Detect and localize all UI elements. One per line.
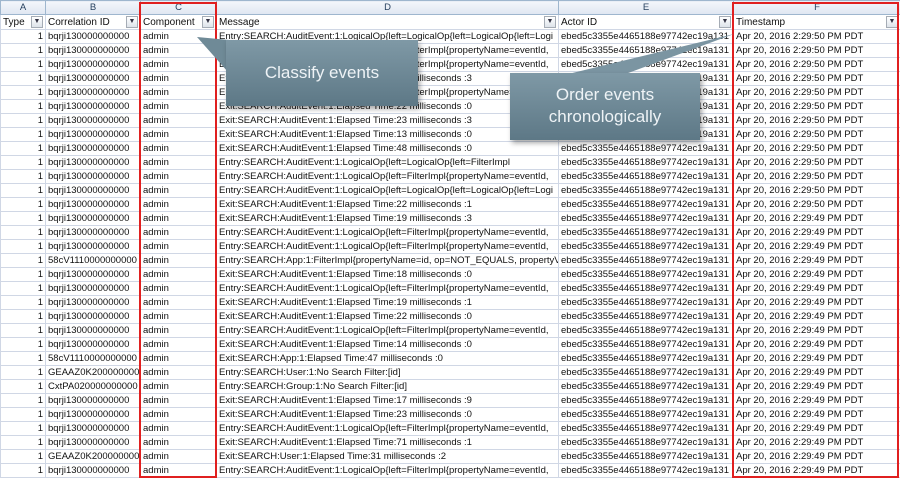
spreadsheet table: admin [143, 423, 169, 434]
spreadsheet table: 1 [38, 45, 43, 56]
spreadsheet table: 1 [38, 339, 43, 350]
spreadsheet table: Exit:SEARCH:AuditEvent:1:Elapsed Time:22 milliseconds :1 [219, 199, 472, 210]
spreadsheet table: ebed5c3355e4465188e97742ec19a131 [561, 437, 729, 448]
spreadsheet table: bqrji130000000000 [48, 311, 129, 322]
spreadsheet table: Apr 20, 2016 2:29:49 PM PDT [736, 395, 863, 406]
spreadsheet table: Apr 20, 2016 2:29:49 PM PDT [736, 465, 863, 476]
highlight: timestamp column [732, 2, 899, 478]
spreadsheet table: 1 [38, 73, 43, 84]
spreadsheet table: admin [143, 87, 169, 98]
spreadsheet table: ebed5c3355e4465188e97742ec19a131 [561, 283, 729, 294]
spreadsheet table: bqrji130000000000 [48, 269, 129, 280]
spreadsheet table: Entry:SEARCH:User:1:No Search Filter:[id] [219, 367, 401, 378]
spreadsheet table: admin [143, 381, 169, 392]
spreadsheet table: 1 [38, 129, 43, 140]
spreadsheet table: 1 [38, 143, 43, 154]
spreadsheet table: 1 [38, 241, 43, 252]
spreadsheet table: ebed5c3355e4465188e97742ec19a131 [561, 395, 729, 406]
spreadsheet table: ebed5c3355e4465188e97742ec19a131 [561, 31, 729, 42]
spreadsheet table: ▼ [34, 18, 40, 25]
spreadsheet table: Entry:SEARCH:AuditEvent:1:LogicalOp{left=FilterImpl{propertyName=eventId, [219, 465, 548, 476]
spreadsheet table: admin [143, 73, 169, 84]
spreadsheet table: ebed5c3355e4465188e97742ec19a131 [561, 185, 729, 196]
spreadsheet table: admin [143, 101, 169, 112]
spreadsheet table: Apr 20, 2016 2:29:49 PM PDT [736, 227, 863, 238]
callout: order events chronologically: chronologically [549, 107, 661, 126]
spreadsheet table: bqrji130000000000 [48, 339, 129, 350]
spreadsheet table: C [175, 2, 182, 13]
spreadsheet table: admin [143, 437, 169, 448]
spreadsheet table: A [20, 2, 26, 13]
spreadsheet table: ebed5c3355e4465188e97742ec19a131 [561, 143, 729, 154]
spreadsheet table: 1 [38, 465, 43, 476]
spreadsheet table: bqrji130000000000 [48, 59, 129, 70]
spreadsheet table: admin [143, 395, 169, 406]
spreadsheet table: Apr 20, 2016 2:29:50 PM PDT [736, 73, 863, 84]
spreadsheet table: 1 [38, 185, 43, 196]
spreadsheet table: Entry:SEARCH:AuditEvent:1:LogicalOp{left=LogicalOp{left=LogicalOp{left=Logi [219, 31, 553, 42]
spreadsheet table: Apr 20, 2016 2:29:50 PM PDT [736, 115, 863, 126]
spreadsheet table: admin [143, 465, 169, 476]
spreadsheet table: ebed5c3355e4465188e97742ec19a131 [561, 353, 729, 364]
spreadsheet table: 1 [38, 115, 43, 126]
spreadsheet table: 1 [38, 437, 43, 448]
spreadsheet table: 1 [38, 255, 43, 266]
spreadsheet table: 58cV1110000000000 [48, 255, 137, 266]
spreadsheet table: admin [143, 213, 169, 224]
spreadsheet table: Entry:SEARCH:AuditEvent:1:LogicalOp{left=FilterImpl{propertyName=eventId, [219, 325, 548, 336]
spreadsheet table: E [643, 2, 649, 13]
spreadsheet table: 1 [38, 325, 43, 336]
spreadsheet table: Entry:SEARCH:App:1:FilterImpl{propertyName=id, op=NOT_EQUALS, propertyV [219, 255, 558, 266]
spreadsheet table: F [814, 2, 820, 13]
spreadsheet table: bqrji130000000000 [48, 45, 129, 56]
spreadsheet table: admin [143, 241, 169, 252]
spreadsheet table: Apr 20, 2016 2:29:50 PM PDT [736, 31, 863, 42]
spreadsheet table: Entry:SEARCH:AuditEvent:1:LogicalOp{left=FilterImpl{propertyName=eventId, [219, 59, 548, 70]
spreadsheet table: Exit:SEARCH:AuditEvent:1:Elapsed Time:48 milliseconds :0 [219, 143, 472, 154]
spreadsheet table: admin [143, 199, 169, 210]
spreadsheet table: Apr 20, 2016 2:29:49 PM PDT [736, 381, 863, 392]
spreadsheet table: admin [143, 311, 169, 322]
spreadsheet table: Exit:SEARCH:AuditEvent:1:Elapsed Time:19 milliseconds :1 [219, 297, 472, 308]
spreadsheet table: admin [143, 129, 169, 140]
spreadsheet table: ebed5c3355e4465188e97742ec19a131 [561, 367, 729, 378]
callout: order events chronologically [510, 73, 700, 140]
spreadsheet table: Exit:SEARCH:AuditEvent:1:Elapsed Time:21 milliseconds :3 [219, 73, 472, 84]
spreadsheet table: Exit:SEARCH:AuditEvent:1:Elapsed Time:18 milliseconds :0 [219, 269, 472, 280]
spreadsheet table: bqrji130000000000 [48, 171, 129, 182]
spreadsheet table: 1 [38, 395, 43, 406]
spreadsheet table: Exit:SEARCH:AuditEvent:1:Elapsed Time:19 milliseconds :3 [219, 213, 472, 224]
spreadsheet table: bqrji130000000000 [48, 241, 129, 252]
spreadsheet table: admin [143, 297, 169, 308]
spreadsheet table: 1 [38, 171, 43, 182]
spreadsheet table: Entry:SEARCH:AuditEvent:1:LogicalOp{left=LogicalOp{left=LogicalOp{left=Logi [219, 185, 553, 196]
spreadsheet table: 1 [38, 213, 43, 224]
spreadsheet table: bqrji130000000000 [48, 115, 129, 126]
spreadsheet table: 1 [38, 297, 43, 308]
spreadsheet table: Apr 20, 2016 2:29:50 PM PDT [736, 59, 863, 70]
spreadsheet table: Exit:SEARCH:AuditEvent:1:Elapsed Time:23 milliseconds :0 [219, 409, 472, 420]
spreadsheet table: ebed5c3355e4465188e97742ec19a131 [561, 213, 729, 224]
spreadsheet table: ebed5c3355e4465188e97742ec19a131 [561, 325, 729, 336]
spreadsheet table: ▼ [205, 18, 211, 25]
spreadsheet table: bqrji130000000000 [48, 297, 129, 308]
spreadsheet table: Apr 20, 2016 2:29:49 PM PDT [736, 353, 863, 364]
spreadsheet table: bqrji130000000000 [48, 31, 129, 42]
spreadsheet table: bqrji130000000000 [48, 73, 129, 84]
spreadsheet table: ebed5c3355e4465188e97742ec19a131 [561, 199, 729, 210]
spreadsheet table: bqrji130000000000 [48, 283, 129, 294]
spreadsheet table: Apr 20, 2016 2:29:49 PM PDT [736, 325, 863, 336]
spreadsheet table: bqrji130000000000 [48, 395, 129, 406]
spreadsheet table: Apr 20, 2016 2:29:50 PM PDT [736, 101, 863, 112]
spreadsheet table: ▼ [547, 18, 553, 25]
spreadsheet table: bqrji130000000000 [48, 325, 129, 336]
spreadsheet table: ▼ [722, 18, 728, 25]
spreadsheet table: Exit:SEARCH:AuditEvent:1:Elapsed Time:71 milliseconds :1 [219, 437, 472, 448]
spreadsheet table: Exit:SEARCH:AuditEvent:1:Elapsed Time:14 milliseconds :0 [219, 339, 472, 350]
spreadsheet table: Correlation ID [48, 16, 110, 28]
spreadsheet table: 1 [38, 353, 43, 364]
spreadsheet table: Apr 20, 2016 2:29:50 PM PDT [736, 199, 863, 210]
spreadsheet table: Apr 20, 2016 2:29:50 PM PDT [736, 45, 863, 56]
spreadsheet table: admin [143, 157, 169, 168]
spreadsheet table: bqrji130000000000 [48, 437, 129, 448]
spreadsheet table: Apr 20, 2016 2:29:49 PM PDT [736, 339, 863, 350]
callout: classify events: Classify events [265, 63, 379, 82]
spreadsheet table: Entry:SEARCH:AuditEvent:1:LogicalOp{left=FilterImpl{propertyName=eventId, [219, 171, 548, 182]
spreadsheet table: 1 [38, 451, 43, 462]
spreadsheet table: ▼ [129, 18, 135, 25]
spreadsheet table: Exit:SEARCH:AuditEvent:1:Elapsed Time:22 milliseconds :0 [219, 101, 472, 112]
spreadsheet table: 1 [38, 409, 43, 420]
spreadsheet table: Exit:SEARCH:AuditEvent:1:Elapsed Time:17 milliseconds :9 [219, 395, 472, 406]
spreadsheet table: Entry:SEARCH:AuditEvent:1:LogicalOp{left=FilterImpl{propertyName=eventId, [219, 45, 548, 56]
spreadsheet table: Apr 20, 2016 2:29:49 PM PDT [736, 451, 863, 462]
spreadsheet table: Apr 20, 2016 2:29:50 PM PDT [736, 143, 863, 154]
spreadsheet table: Entry:SEARCH:AuditEvent:1:LogicalOp{left=FilterImpl{propertyName=eventId, [219, 241, 548, 252]
spreadsheet table: admin [143, 353, 169, 364]
spreadsheet table: Apr 20, 2016 2:29:50 PM PDT [736, 171, 863, 182]
spreadsheet table: 1 [38, 59, 43, 70]
spreadsheet table: ebed5c3355e4465188e97742ec19a131 [561, 311, 729, 322]
spreadsheet table: Apr 20, 2016 2:29:50 PM PDT [736, 185, 863, 196]
spreadsheet table: bqrji130000000000 [48, 101, 129, 112]
spreadsheet table: Entry:SEARCH:AuditEvent:1:LogicalOp{left=FilterImpl{propertyName=eventId, [219, 87, 548, 98]
spreadsheet table: bqrji130000000000 [48, 423, 129, 434]
spreadsheet table: bqrji130000000000 [48, 465, 129, 476]
spreadsheet table: 1 [38, 423, 43, 434]
spreadsheet table: ebed5c3355e4465188e97742ec19a131 [561, 465, 729, 476]
spreadsheet table: 1 [38, 227, 43, 238]
spreadsheet table: admin [143, 339, 169, 350]
spreadsheet table: Entry:SEARCH:Group:1:No Search Filter:[id] [219, 381, 407, 392]
spreadsheet table: bqrji130000000000 [48, 227, 129, 238]
spreadsheet table: Apr 20, 2016 2:29:49 PM PDT [736, 297, 863, 308]
spreadsheet table: ebed5c3355e4465188e97742ec19a131 [561, 409, 729, 420]
spreadsheet table: admin [143, 115, 169, 126]
spreadsheet table: Entry:SEARCH:AuditEvent:1:LogicalOp{left=FilterImpl{propertyName=eventId, [219, 283, 548, 294]
spreadsheet table: Entry:SEARCH:AuditEvent:1:LogicalOp{left=LogicalOp{left=FilterImpl [219, 157, 510, 168]
spreadsheet table: Actor ID [561, 16, 597, 28]
spreadsheet table: ebed5c3355e4465188e97742ec19a131 [561, 297, 729, 308]
spreadsheet table: Apr 20, 2016 2:29:49 PM PDT [736, 241, 863, 252]
spreadsheet table: bqrji130000000000 [48, 409, 129, 420]
spreadsheet table: admin [143, 269, 169, 280]
spreadsheet table: ebed5c3355e4465188e97742ec19a131 [561, 451, 729, 462]
spreadsheet table: 1 [38, 269, 43, 280]
spreadsheet table: 1 [38, 311, 43, 322]
spreadsheet table: admin [143, 367, 169, 378]
spreadsheet table: bqrji130000000000 [48, 87, 129, 98]
spreadsheet table: Exit:SEARCH:App:1:Elapsed Time:47 milliseconds :0 [219, 353, 443, 364]
spreadsheet table: Exit:SEARCH:AuditEvent:1:Elapsed Time:23 milliseconds :3 [219, 115, 472, 126]
spreadsheet table: Entry:SEARCH:AuditEvent:1:LogicalOp{left=FilterImpl{propertyName=eventId, [219, 423, 548, 434]
spreadsheet table: Component [143, 16, 195, 28]
spreadsheet table: 58cV1110000000000 [48, 353, 137, 364]
spreadsheet table: 1 [38, 31, 43, 42]
spreadsheet table: Apr 20, 2016 2:29:50 PM PDT [736, 87, 863, 98]
spreadsheet table: Apr 20, 2016 2:29:49 PM PDT [736, 437, 863, 448]
spreadsheet table: Apr 20, 2016 2:29:49 PM PDT [736, 409, 863, 420]
spreadsheet table: Timestamp [736, 16, 785, 28]
spreadsheet table: ebed5c3355e4465188e97742ec19a131 [561, 45, 729, 56]
spreadsheet table: admin [143, 171, 169, 182]
spreadsheet table: bqrji130000000000 [48, 185, 129, 196]
spreadsheet table: bqrji130000000000 [48, 199, 129, 210]
spreadsheet table: Apr 20, 2016 2:29:49 PM PDT [736, 311, 863, 322]
spreadsheet table: Apr 20, 2016 2:29:49 PM PDT [736, 269, 863, 280]
callout: order events chronologically: Order events [556, 85, 654, 104]
spreadsheet table: ebed5c3355e4465188e97742ec19a131 [561, 101, 729, 112]
spreadsheet table: 1 [38, 101, 43, 112]
spreadsheet table: admin [143, 143, 169, 154]
spreadsheet table: admin [143, 185, 169, 196]
spreadsheet table: admin [143, 255, 169, 266]
spreadsheet table: Exit:SEARCH:AuditEvent:1:Elapsed Time:13 milliseconds :0 [219, 129, 472, 140]
spreadsheet table: Type [3, 16, 25, 28]
spreadsheet table: 1 [38, 367, 43, 378]
spreadsheet table: admin [143, 451, 169, 462]
spreadsheet table: bqrji130000000000 [48, 143, 129, 154]
highlight: component column [139, 2, 217, 478]
spreadsheet table: Apr 20, 2016 2:29:49 PM PDT [736, 423, 863, 434]
spreadsheet table: bqrji130000000000 [48, 157, 129, 168]
spreadsheet table: Apr 20, 2016 2:29:50 PM PDT [736, 129, 863, 140]
callout: classify events [226, 40, 418, 106]
spreadsheet table: ebed5c3355e4465188e97742ec19a131 [561, 423, 729, 434]
spreadsheet table: Exit:SEARCH:AuditEvent:1:Elapsed Time:22 milliseconds :0 [219, 311, 472, 322]
spreadsheet table: 1 [38, 87, 43, 98]
spreadsheet table: Exit:SEARCH:User:1:Elapsed Time:31 milliseconds :2 [219, 451, 446, 462]
spreadsheet table: ebed5c3355e4465188e97742ec19a131 [561, 381, 729, 392]
spreadsheet table: Apr 20, 2016 2:29:49 PM PDT [736, 213, 863, 224]
spreadsheet table: ebed5c3355e4465188e97742ec19a131 [561, 171, 729, 182]
spreadsheet table: Apr 20, 2016 2:29:49 PM PDT [736, 255, 863, 266]
spreadsheet table: admin [143, 283, 169, 294]
spreadsheet table: CxtPA020000000000 [48, 381, 138, 392]
spreadsheet table: ebed5c3355e4465188e97742ec19a131 [561, 73, 729, 84]
spreadsheet table: ebed5c3355e4465188e97742ec19a131 [561, 87, 729, 98]
spreadsheet table: admin [143, 31, 169, 42]
spreadsheet table: Apr 20, 2016 2:29:50 PM PDT [736, 157, 863, 168]
spreadsheet table: bqrji130000000000 [48, 129, 129, 140]
spreadsheet table: bqrji130000000000 [48, 213, 129, 224]
spreadsheet table: admin [143, 227, 169, 238]
spreadsheet table: admin [143, 409, 169, 420]
spreadsheet table: Message [219, 16, 260, 28]
spreadsheet table: ebed5c3355e4465188e97742ec19a131 [561, 255, 729, 266]
spreadsheet table: Apr 20, 2016 2:29:49 PM PDT [736, 367, 863, 378]
spreadsheet table: 1 [38, 283, 43, 294]
spreadsheet table: ebed5c3355e4465188e97742ec19a131 [561, 59, 729, 70]
spreadsheet table: admin [143, 325, 169, 336]
spreadsheet table: 1 [38, 199, 43, 210]
spreadsheet table: 1 [38, 381, 43, 392]
spreadsheet table: 1 [38, 157, 43, 168]
spreadsheet table: ebed5c3355e4465188e97742ec19a131 [561, 269, 729, 280]
spreadsheet table: ebed5c3355e4465188e97742ec19a131 [561, 129, 729, 140]
spreadsheet table: Entry:SEARCH:AuditEvent:1:LogicalOp{left=FilterImpl{propertyName=eventId, [219, 227, 548, 238]
spreadsheet table: D [384, 2, 391, 13]
spreadsheet table: ebed5c3355e4465188e97742ec19a131 [561, 227, 729, 238]
spreadsheet table: ebed5c3355e4465188e97742ec19a131 [561, 241, 729, 252]
spreadsheet table: admin [143, 45, 169, 56]
spreadsheet table: ebed5c3355e4465188e97742ec19a131 [561, 157, 729, 168]
spreadsheet table: ▼ [889, 18, 895, 25]
spreadsheet table: ebed5c3355e4465188e97742ec19a131 [561, 339, 729, 350]
spreadsheet table: admin [143, 59, 169, 70]
spreadsheet table: B [90, 2, 96, 13]
spreadsheet table: Apr 20, 2016 2:29:49 PM PDT [736, 283, 863, 294]
spreadsheet table: ebed5c3355e4465188e97742ec19a131 [561, 115, 729, 126]
